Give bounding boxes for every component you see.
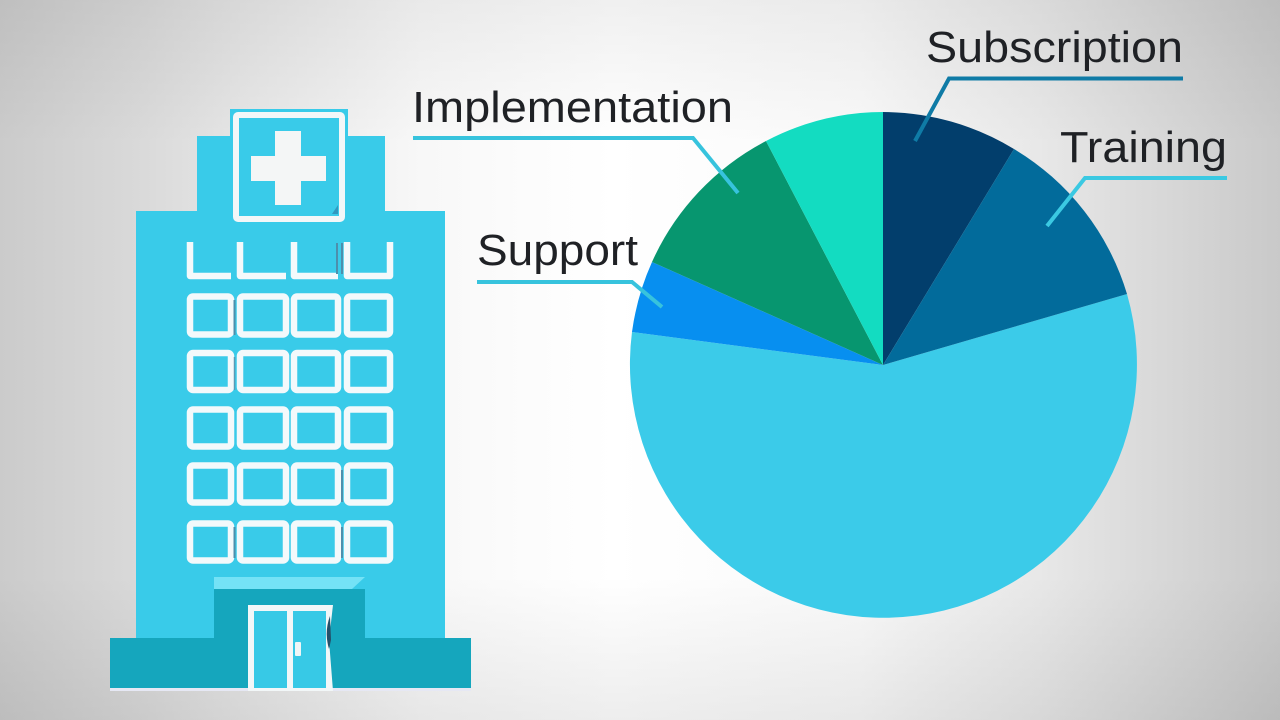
window row 4	[190, 410, 390, 446]
window row 6	[190, 524, 390, 560]
window row 1	[190, 242, 390, 276]
slice: subscription	[883, 112, 1014, 365]
slice: large remainder	[630, 294, 1137, 618]
label: Training: Training	[1060, 123, 1227, 172]
label: Implementation: Implementation	[412, 83, 733, 132]
slice: implementation	[652, 141, 883, 365]
slice: support	[632, 262, 883, 365]
label: Subscription	[915, 23, 1183, 141]
label: Subscription: Subscription	[926, 23, 1183, 72]
base and entrance block	[110, 589, 471, 688]
label: Support: Support	[477, 226, 638, 275]
icon: hospital building	[110, 109, 471, 691]
leader line: Subscription	[915, 78, 1183, 141]
leader line: Implementation	[413, 138, 738, 193]
entrance awning	[214, 577, 365, 589]
window row 3	[190, 353, 390, 390]
label: Implementation	[412, 83, 738, 193]
slice: teal unlabeled	[766, 112, 883, 365]
building tower body	[136, 136, 445, 640]
sign box with medical cross	[230, 109, 348, 219]
base highlight strip	[110, 688, 471, 691]
label: Support	[477, 226, 662, 307]
window row 2	[190, 296, 390, 335]
leader line: Training	[1047, 178, 1227, 226]
window row 5	[190, 466, 390, 502]
leader line: Support	[477, 282, 662, 307]
entrance doors	[248, 605, 333, 691]
pie chart	[630, 112, 1137, 618]
slice: training	[883, 149, 1127, 365]
label: Training	[1047, 123, 1227, 226]
windows grid	[190, 242, 390, 560]
